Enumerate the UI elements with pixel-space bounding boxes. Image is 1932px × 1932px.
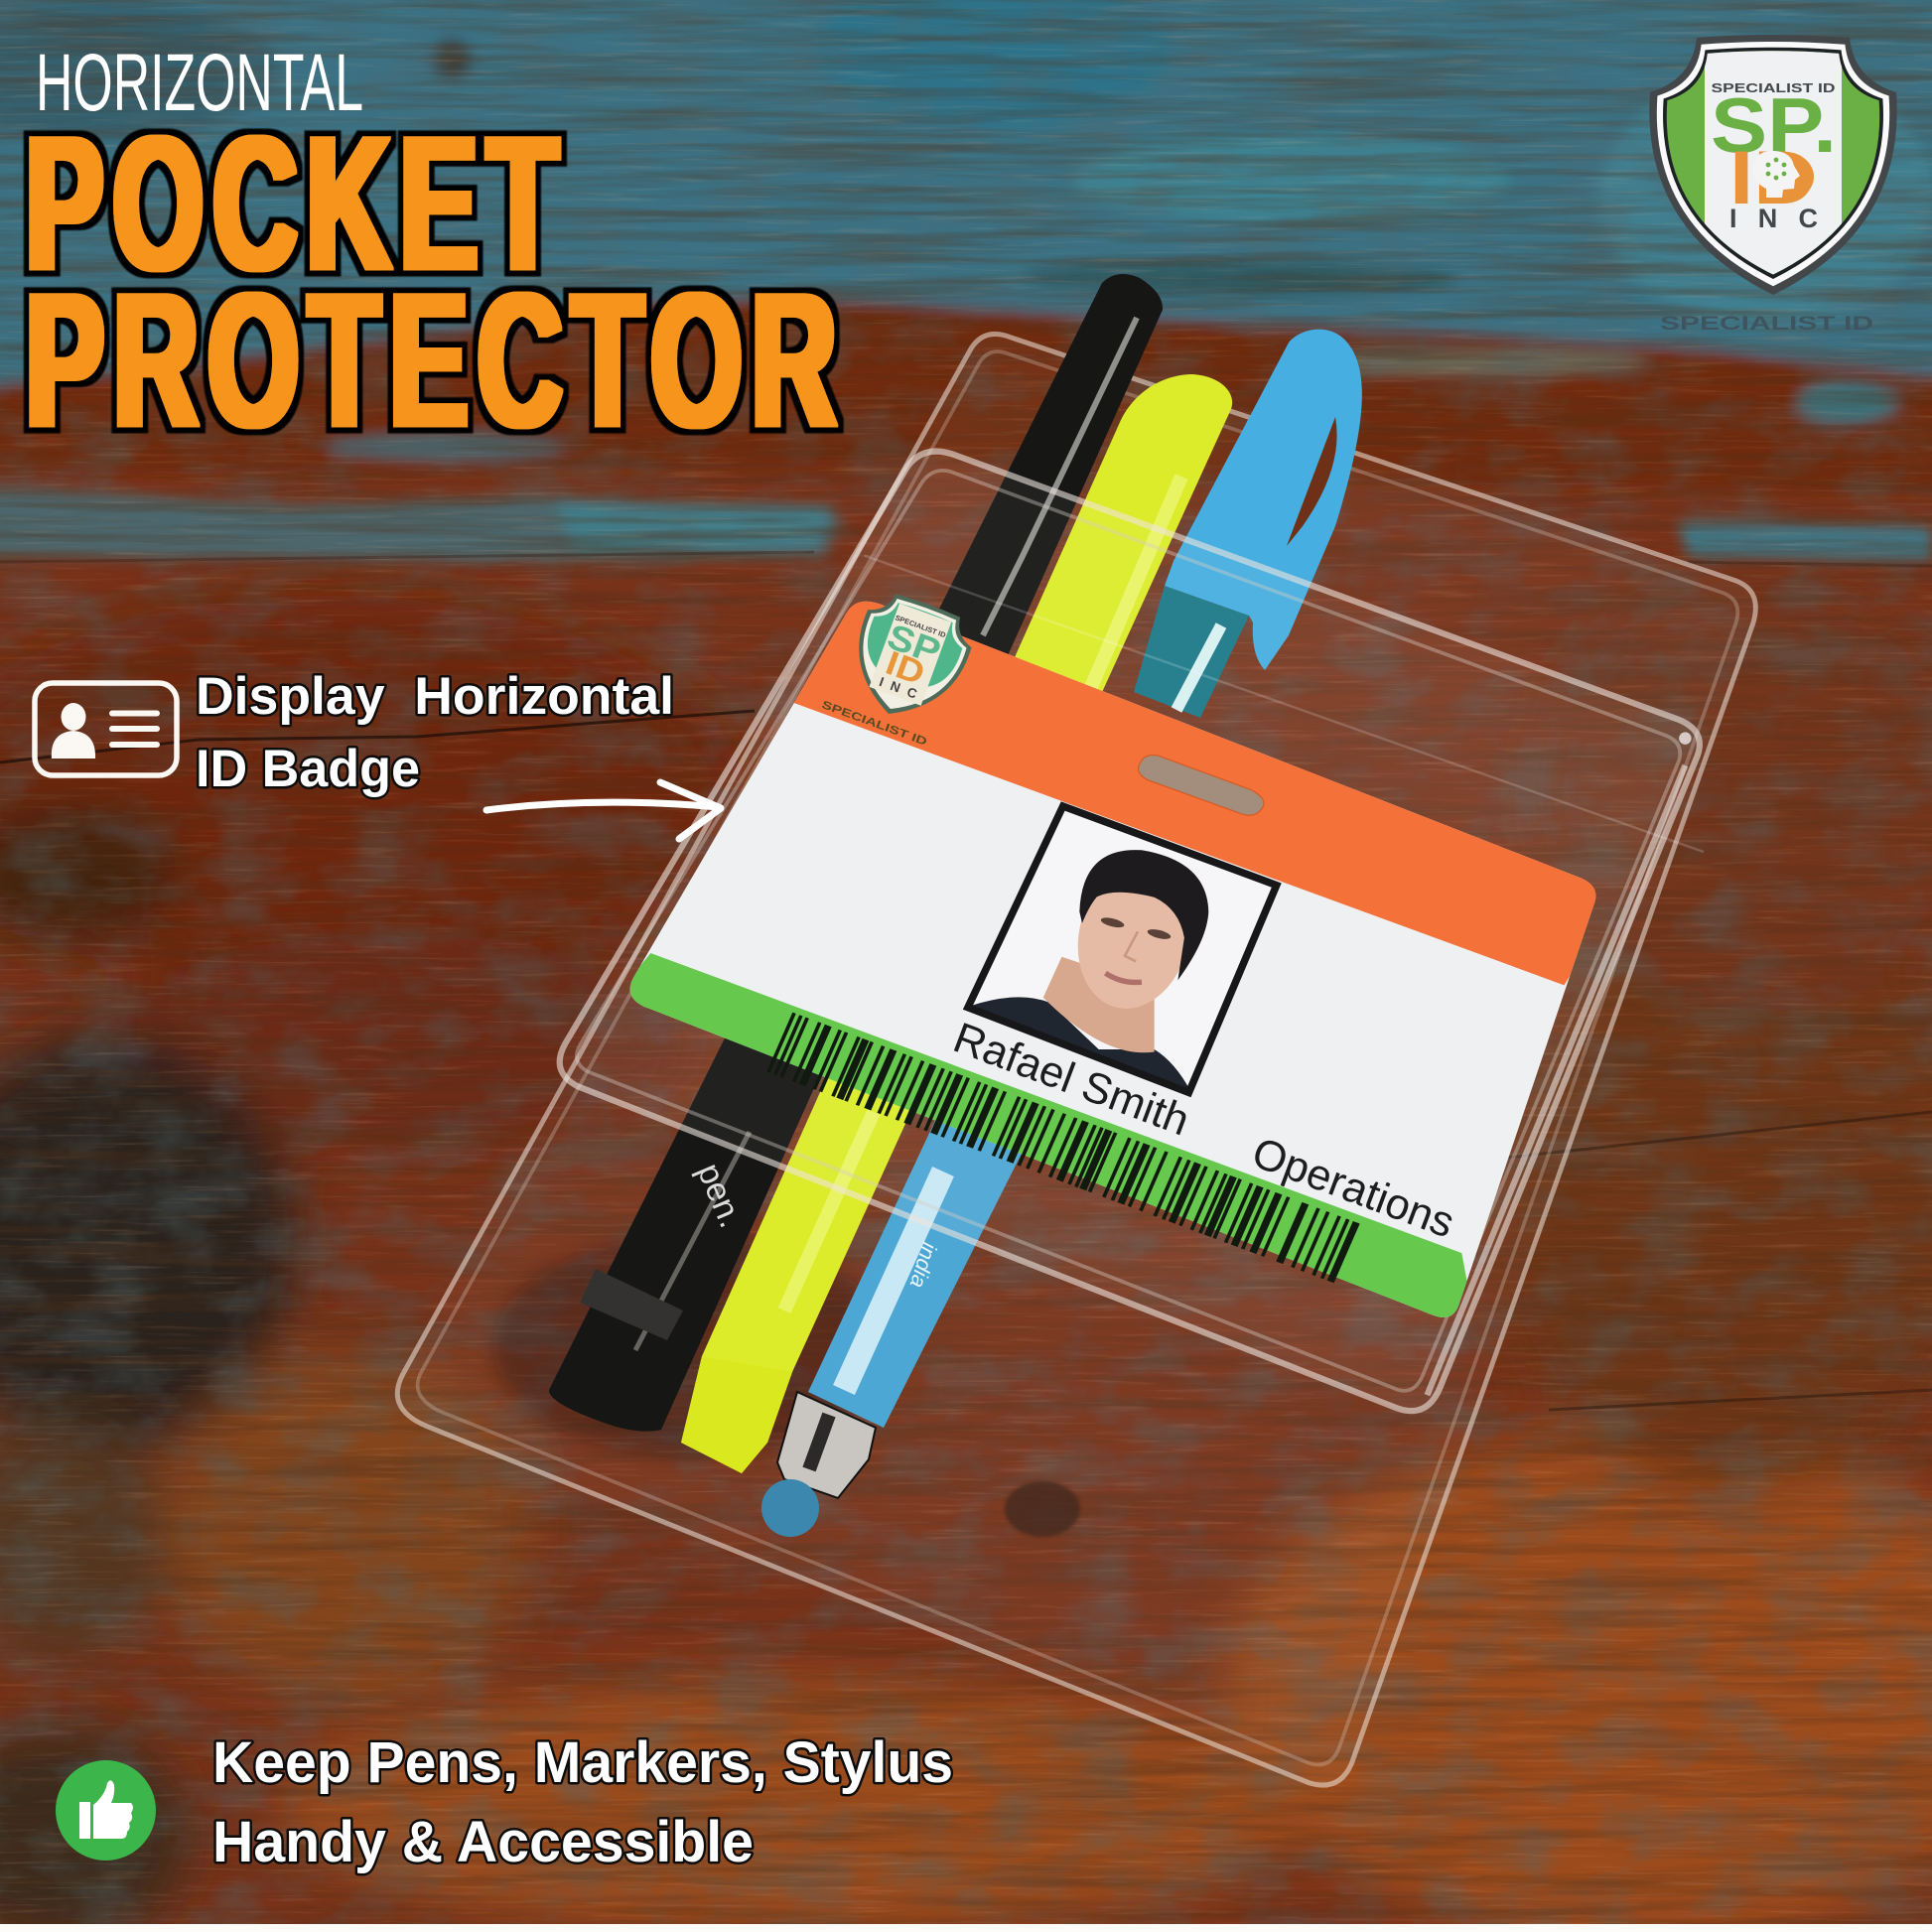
ID badge card — [629, 594, 1596, 1317]
logo wordmark — [1711, 80, 1837, 233]
logo wordmark: SP. — [1711, 81, 1837, 169]
small card logo: INC — [878, 674, 919, 702]
logo wordmark: SPECIALIST ID — [1711, 80, 1836, 95]
pocket protector: front vinyl pocket — [560, 452, 1704, 1411]
face — [1078, 850, 1209, 1009]
brand name under logo: SPECIALIST ID — [1660, 314, 1873, 335]
head icon — [1753, 151, 1814, 201]
department label: Operations — [1246, 1129, 1460, 1248]
arrow to badge — [486, 782, 721, 839]
small logo caption: SPECIALIST ID — [820, 699, 928, 749]
small card logo: ID — [881, 644, 929, 693]
logo wordmark: INC — [1729, 204, 1818, 233]
icon: ID card — [35, 683, 177, 775]
icon: green thumbs up — [56, 1760, 156, 1861]
callout: display horizontal ID badge: ID Badge — [196, 740, 420, 798]
blue pen with cap, chrome section and stylus — [761, 330, 1362, 1537]
title: POCKET: POCKET — [26, 96, 568, 310]
small card logo: SPECIALIST ID — [894, 614, 947, 639]
callout: display horizontal ID badge: Display Horizontal — [196, 667, 674, 726]
yellow highlighter — [681, 374, 1232, 1473]
brand logo: shield — [1649, 35, 1897, 303]
portrait photo — [968, 806, 1277, 1105]
shield outer rim — [1649, 35, 1897, 295]
shield green panels — [1667, 51, 1879, 275]
shield white centre — [1705, 51, 1842, 274]
bottom white strip — [0, 1924, 1932, 1932]
shoulders and shirt — [973, 997, 1187, 1088]
logo wordmark: ID — [1729, 136, 1816, 220]
lanyard slot — [1139, 755, 1264, 815]
green footer band — [629, 953, 1467, 1317]
card base — [629, 602, 1596, 1317]
pen brand text: india — [905, 1240, 942, 1291]
title: HORIZONTAL: HORIZONTAL — [36, 38, 363, 128]
black pen — [549, 274, 1163, 1432]
callout: keep pens handy: Keep Pens, Markers, Stylus — [212, 1730, 953, 1795]
small card logo: SP — [883, 617, 946, 672]
title: PROTECTOR: PROTECTOR — [26, 253, 846, 467]
pens group — [549, 274, 1362, 1537]
neck — [1043, 957, 1155, 1052]
callout: display horizontal ID badge — [196, 667, 674, 798]
callout: keep pens handy — [212, 1730, 953, 1874]
small card logo — [837, 586, 981, 733]
orange header band — [790, 580, 1629, 985]
name label: Rafael Smith — [947, 1014, 1195, 1146]
barcode — [768, 1013, 1356, 1282]
pen brand text: pen. — [690, 1158, 750, 1233]
callout: keep pens handy: Handy & Accessible — [212, 1810, 754, 1874]
pocket protector: back vinyl sheet — [397, 334, 1755, 1785]
